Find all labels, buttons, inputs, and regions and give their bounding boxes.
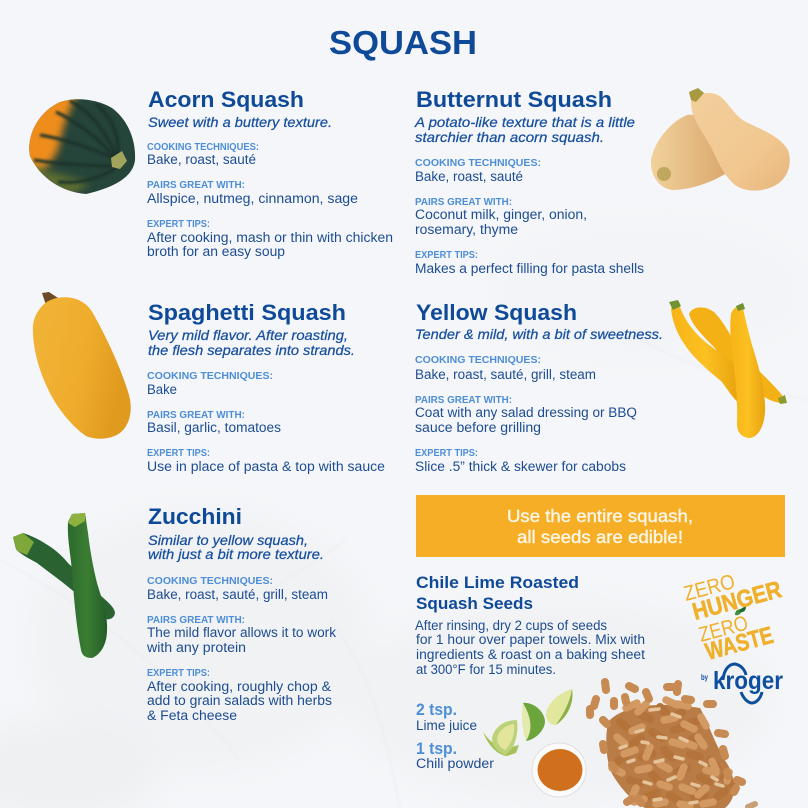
description bbox=[148, 327, 355, 358]
expert tips: add to grain salads with herbs bbox=[147, 693, 332, 708]
expert tips: broth for an easy soup bbox=[147, 244, 285, 259]
description bbox=[414, 114, 635, 145]
cooking techniques: Bake bbox=[147, 382, 177, 397]
panel: yellow squash bbox=[415, 300, 663, 474]
description: Sweet with a buttery texture. bbox=[148, 114, 332, 130]
pairs great with bbox=[415, 394, 637, 435]
recipe instructions: at 300°F for 15 minutes. bbox=[416, 662, 556, 677]
expert tips: & Feta cheese bbox=[147, 708, 237, 723]
heading: Acorn Squash bbox=[148, 87, 304, 112]
pairs great with: PAIRS GREAT WITH: bbox=[415, 196, 512, 208]
expert tips bbox=[415, 447, 626, 474]
ingredient: lime juice bbox=[416, 700, 477, 733]
description: A potato-like texture that is a little bbox=[414, 114, 635, 130]
logo: kroger: by bbox=[701, 673, 708, 682]
ingredient: chili powder: Chili powder bbox=[416, 756, 495, 771]
callout: use the entire squash: Use the entire squash, bbox=[507, 506, 693, 526]
expert tips: EXPERT TIPS: bbox=[147, 667, 210, 679]
icon: zucchini bbox=[13, 513, 115, 658]
icon: roasted seeds bbox=[590, 682, 755, 808]
expert tips bbox=[147, 218, 393, 259]
expert tips: After cooking, roughly chop & bbox=[147, 679, 331, 694]
icon: acorn squash bbox=[29, 99, 136, 194]
heading: Spaghetti Squash bbox=[148, 300, 346, 325]
expert tips: EXPERT TIPS: bbox=[147, 218, 210, 230]
cooking techniques: Bake, roast, sauté, grill, steam bbox=[415, 367, 596, 382]
cooking techniques: Bake, roast, sauté, grill, steam bbox=[147, 587, 328, 602]
pairs great with: rosemary, thyme bbox=[415, 222, 518, 237]
panel: recipe bbox=[415, 573, 645, 771]
logo: kroger: kroger bbox=[713, 667, 783, 695]
logo: zero hunger zero waste: WASTE bbox=[703, 622, 776, 666]
expert tips bbox=[415, 249, 644, 276]
cooking techniques bbox=[415, 157, 541, 184]
panel: zucchini bbox=[146, 504, 336, 723]
icon: leaf bbox=[735, 607, 746, 615]
cooking techniques: COOKING TECHNIQUES: bbox=[147, 370, 273, 382]
heading: Butternut Squash bbox=[416, 87, 612, 112]
recipe heading bbox=[416, 573, 579, 613]
expert tips: EXPERT TIPS: bbox=[147, 447, 210, 459]
pairs great with bbox=[147, 409, 281, 435]
ingredient: chili powder: 1 tsp. bbox=[416, 739, 457, 758]
cooking techniques: Bake, roast, sauté bbox=[415, 169, 523, 184]
cooking techniques: COOKING TECHNIQUES: bbox=[147, 575, 273, 587]
description: starchier than acorn squash. bbox=[415, 129, 604, 145]
cooking techniques bbox=[147, 575, 328, 602]
cooking techniques: COOKING TECHNIQUES: bbox=[147, 141, 259, 153]
recipe instructions: After rinsing, dry 2 cups of seeds bbox=[415, 618, 607, 633]
cooking techniques bbox=[147, 370, 273, 397]
pairs great with: PAIRS GREAT WITH: bbox=[415, 394, 512, 406]
panel: butternut squash bbox=[414, 87, 644, 276]
logo: zero hunger zero waste bbox=[681, 570, 784, 666]
recipe instructions: for 1 hour over paper towels. Mix with bbox=[416, 632, 645, 647]
cooking techniques: COOKING TECHNIQUES: bbox=[415, 354, 541, 366]
icon: lime wedges bbox=[483, 689, 572, 756]
expert tips: EXPERT TIPS: bbox=[415, 447, 478, 459]
recipe heading: Chile Lime Roasted bbox=[416, 573, 579, 592]
title: SQUASH bbox=[329, 25, 477, 62]
logo: zero hunger zero waste: ZERO bbox=[696, 612, 751, 647]
expert tips: Use in place of pasta & top with sauce bbox=[147, 459, 385, 474]
expert tips: Makes a perfect filling for pasta shells bbox=[415, 261, 644, 276]
ingredient: lime juice: 2 tsp. bbox=[416, 700, 457, 719]
icon: spaghetti squash bbox=[33, 292, 131, 439]
expert tips: Slice .5” thick & skewer for cabobs bbox=[415, 459, 626, 474]
logo: zero hunger zero waste: HUNGER bbox=[690, 576, 784, 626]
expert tips bbox=[147, 667, 332, 723]
pairs great with: PAIRS GREAT WITH: bbox=[147, 614, 245, 626]
description: the flesh separates into strands. bbox=[148, 342, 355, 358]
panel: acorn squash bbox=[147, 87, 393, 259]
icon: bowl of chili powder bbox=[532, 743, 586, 797]
pairs great with: The mild flavor allows it to work bbox=[147, 625, 336, 640]
description: Very mild flavor. After roasting, bbox=[148, 327, 348, 343]
pairs great with: with any protein bbox=[146, 640, 246, 655]
pairs great with: PAIRS GREAT WITH: bbox=[147, 179, 245, 191]
pairs great with: sauce before grilling bbox=[415, 420, 541, 435]
logo: kroger bbox=[701, 664, 783, 703]
description bbox=[148, 532, 324, 562]
cooking techniques: COOKING TECHNIQUES: bbox=[415, 157, 541, 169]
ingredient: lime juice: Lime juice bbox=[416, 718, 477, 733]
expert tips: After cooking, mash or thin with chicken bbox=[147, 230, 393, 245]
description: Similar to yellow squash, bbox=[148, 532, 308, 548]
pairs great with bbox=[146, 614, 336, 655]
pairs great with bbox=[415, 196, 587, 237]
cooking techniques: Bake, roast, sauté bbox=[147, 152, 256, 167]
pairs great with: Basil, garlic, tomatoes bbox=[147, 420, 281, 435]
pairs great with: PAIRS GREAT WITH: bbox=[147, 409, 245, 421]
heading: Yellow Squash bbox=[416, 300, 577, 325]
recipe heading: Squash Seeds bbox=[416, 594, 533, 613]
recipe instructions bbox=[415, 618, 645, 677]
pairs great with: Allspice, nutmeg, cinnamon, sage bbox=[147, 191, 358, 206]
callout: use the entire squash: all seeds are edible! bbox=[517, 527, 683, 547]
cooking techniques bbox=[147, 141, 259, 167]
pairs great with: Coconut milk, ginger, onion, bbox=[415, 207, 587, 222]
heading: Zucchini bbox=[148, 504, 242, 529]
pairs great with: Coat with any salad dressing or BBQ bbox=[415, 405, 637, 420]
ingredient: chili powder bbox=[416, 739, 495, 771]
icon: yellow squash bbox=[669, 300, 787, 438]
icon: butternut squash bbox=[651, 88, 790, 191]
logo: zero hunger zero waste: ZERO bbox=[681, 570, 738, 606]
description: with just a bit more texture. bbox=[148, 546, 324, 562]
expert tips: EXPERT TIPS: bbox=[415, 249, 478, 261]
callout: use the entire squash bbox=[416, 495, 785, 557]
description: Tender & mild, with a bit of sweetness. bbox=[415, 326, 663, 342]
cooking techniques bbox=[415, 354, 596, 382]
recipe instructions: ingredients & roast on a baking sheet bbox=[416, 647, 645, 662]
panel: spaghetti squash bbox=[147, 300, 385, 474]
pairs great with bbox=[147, 179, 358, 206]
expert tips bbox=[147, 447, 385, 474]
